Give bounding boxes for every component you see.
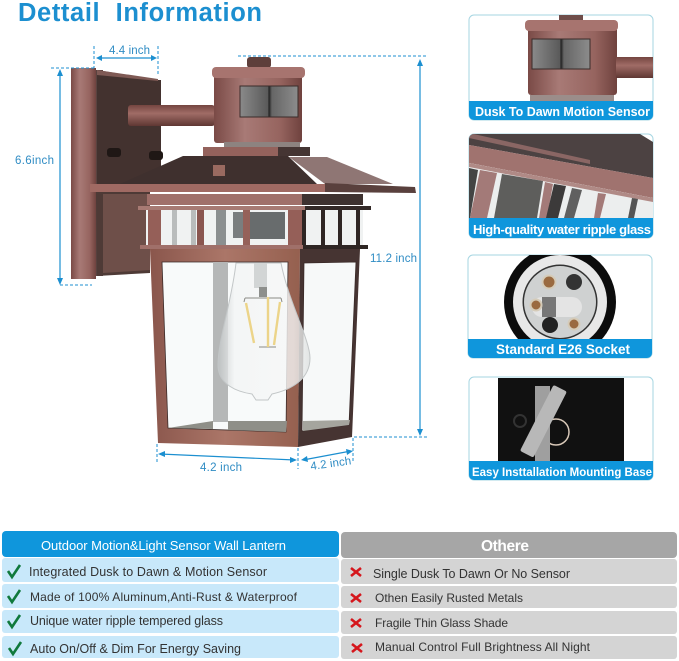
- dimension: 6.6 inch height: 6.6inch: [15, 155, 54, 167]
- row: glass: [2, 610, 339, 633]
- row: manual control: [341, 636, 677, 659]
- dimension: 4.2 inch side width: 4.2 inch: [310, 455, 352, 473]
- caption: High-quality water ripple glass: [473, 222, 651, 237]
- row: aluminum: [2, 584, 339, 608]
- motion sensor: [203, 57, 310, 156]
- row: thin glass: [341, 611, 677, 634]
- row: auto on/off: Auto On/Off & Dim For Energy Saving: [30, 642, 241, 656]
- panel: mounting base detail: [469, 377, 653, 480]
- row: thin glass: Fragile Thin Glass Shade: [375, 616, 508, 630]
- light bulb: [218, 263, 310, 400]
- lantern product photo: [71, 57, 416, 447]
- dimension: 6.6 inch height: [15, 68, 94, 285]
- dimension: 4.2 inch front width: [157, 444, 298, 474]
- row: integrated sensor: [2, 558, 339, 582]
- row: auto on/off: [2, 636, 339, 658]
- lantern body and glass: [150, 249, 360, 447]
- roof: [90, 156, 416, 193]
- header: Othere: Othere: [481, 538, 529, 555]
- panel: water ripple glass detail: [469, 133, 653, 238]
- panel: motion sensor detail: [469, 15, 653, 120]
- panel: E26 socket detail: [468, 246, 652, 358]
- wall plate: [71, 68, 163, 279]
- row: single sensor: [341, 559, 677, 584]
- row: aluminum: Made of 100% Aluminum,Anti-Rust & Waterproof: [30, 590, 298, 604]
- row: single sensor: Single Dusk To Dawn Or No Sensor: [373, 567, 570, 581]
- row: integrated sensor: Integrated Dusk to Dawn & Motion Sensor: [29, 565, 267, 579]
- comparison column: this lantern: [2, 531, 339, 658]
- dimension: 4.2 inch side width: [301, 438, 353, 473]
- row: glass: Unique water ripple tempered glass: [30, 614, 223, 628]
- header: Othere: [341, 532, 677, 558]
- caption: Standard E26 Socket: [496, 342, 630, 357]
- row: manual control: Manual Control Full Brightness All Night: [375, 640, 591, 654]
- dimension: 4.4 inch width: 4.4 inch: [109, 45, 150, 57]
- row: rusted metals: [341, 586, 677, 608]
- dimension: 4.4 inch width: [94, 45, 158, 76]
- header: Outdoor Motion&Light Sensor Wall Lantern: [2, 531, 339, 557]
- comparison column: others: [341, 532, 677, 659]
- caption: Easy Insttallation Mounting Base: [472, 467, 652, 479]
- header: Outdoor Motion&Light Sensor Wall Lantern: Outdoor Motion&Light Sensor Wall Lantern: [41, 538, 286, 553]
- dimension: 11.2 inch height: 11.2 inch: [370, 253, 417, 265]
- dimension: 4.2 inch front width: 4.2 inch: [200, 462, 242, 474]
- row: rusted metals: Othen Easily Rusted Metals: [375, 591, 523, 605]
- arm: [128, 105, 215, 126]
- top lantern gallery: [138, 194, 371, 249]
- dimension: 11.2 inch height: [238, 56, 428, 437]
- caption: Dusk To Dawn Motion Sensor: [475, 105, 650, 119]
